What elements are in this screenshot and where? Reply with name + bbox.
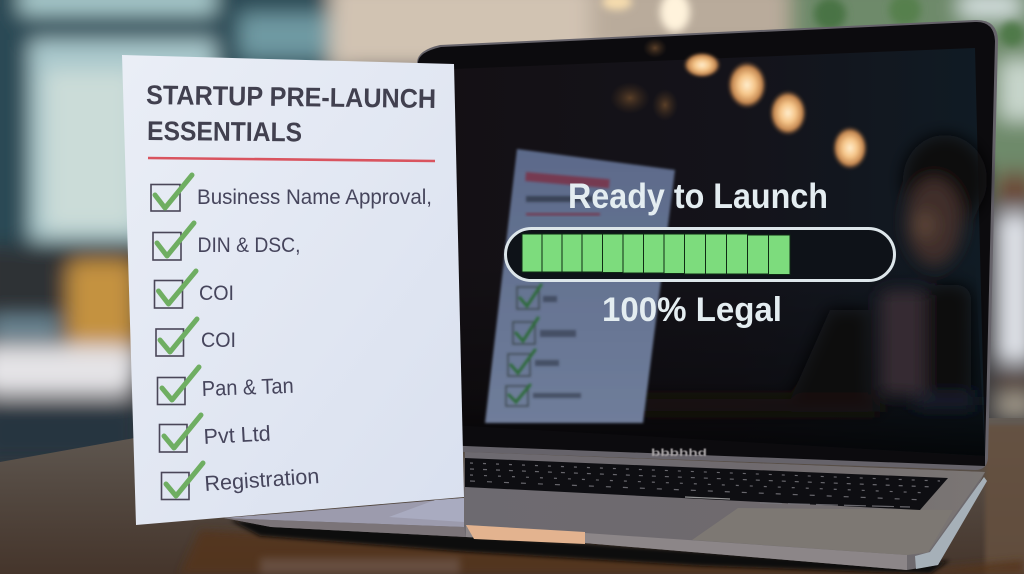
laptop base [224,452,987,570]
item: COI: COI [199,281,234,305]
red divider [148,158,435,161]
screen [430,48,985,456]
checklist card [122,55,464,525]
item: Pvt Ltd [160,415,271,452]
laptop [224,20,998,570]
reflected checklist card [485,149,675,423]
card title: ESSENTIALS [147,116,302,147]
100% legal label: 100% Legal [602,291,782,329]
item: Pan & Tan [158,367,294,404]
laptop lid [417,20,998,470]
reflected bokeh lights [610,38,868,170]
item: COI [154,271,234,308]
item: DIN & DSC [153,223,300,260]
item: Pvt Ltd: Pvt Ltd [203,422,271,449]
wooden table [0,418,1024,574]
card title [146,80,436,147]
gold reflection strip on laptop front [466,525,585,544]
hinge logo: bbbhhd [651,447,707,459]
item: Business Name Approval: Business Name Approval, [197,185,432,209]
card title: STARTUP PRE-LAUNCH [146,80,436,114]
item: DIN & DSC: DIN & DSC, [198,233,300,257]
item: COI second [156,319,236,356]
reflected person [640,135,987,412]
item: Pan & Tan: Pan & Tan [201,374,294,401]
ready to launch heading: Ready to Launch [568,177,828,216]
item: Registration [162,463,320,500]
item: Registration: Registration [204,464,320,496]
item: COI second: COI [201,328,236,352]
item: Business Name Approval [151,175,432,211]
progress bar [506,228,894,280]
keyboard [465,458,948,510]
